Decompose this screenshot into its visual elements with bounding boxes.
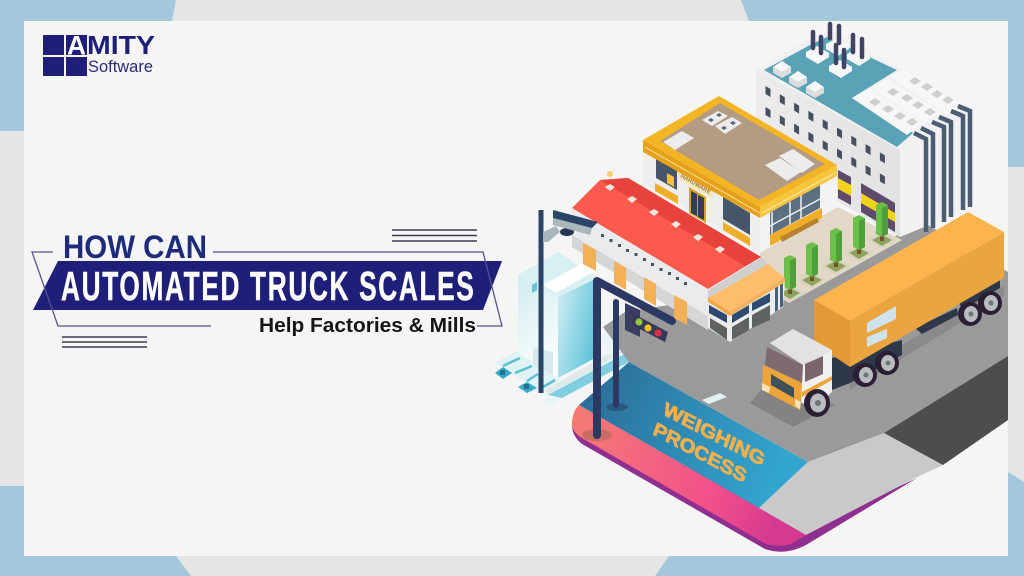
gable — [708, 257, 768, 298]
red roof — [572, 178, 761, 289]
logo — [43, 30, 155, 76]
shop sign: HARDWARE — [679, 174, 711, 196]
concrete apron — [759, 433, 943, 535]
warehouse — [572, 171, 785, 342]
roof panels — [663, 131, 815, 181]
logo: Software — [88, 58, 153, 76]
window plinths — [655, 183, 678, 204]
hardware shop building — [643, 96, 837, 253]
warehouse doors — [583, 243, 687, 325]
left wall windows — [656, 158, 677, 190]
rooftop boxes — [773, 67, 824, 98]
roof — [660, 103, 825, 200]
chimneys — [813, 24, 862, 67]
roof — [756, 29, 973, 150]
windows — [766, 86, 885, 184]
roof parapet — [643, 96, 837, 207]
annex windows — [709, 283, 783, 340]
left wall — [643, 140, 760, 253]
annex wall — [708, 280, 785, 342]
label: weighing process — [651, 398, 768, 487]
wall pipes — [914, 106, 970, 232]
scale deck — [542, 326, 629, 407]
road surface — [603, 225, 1008, 462]
banner — [33, 261, 502, 310]
truck shadow — [750, 380, 835, 427]
rear wheels — [853, 291, 1002, 387]
asphalt strip — [884, 356, 1008, 465]
right wall — [900, 108, 973, 237]
bench — [780, 218, 819, 242]
roof vents — [605, 184, 725, 253]
shop door — [689, 187, 706, 223]
scale ramp and base — [495, 350, 560, 393]
chassis — [832, 340, 902, 390]
banner outline frame — [32, 252, 502, 326]
rooftop solar rows — [852, 89, 922, 135]
label: weighing process: PROCESS — [651, 418, 750, 487]
logo: MITY — [87, 32, 155, 60]
trees — [775, 202, 897, 302]
security camera pole — [541, 210, 598, 393]
title block — [32, 229, 502, 347]
subheading: Help Factories & Mills — [259, 314, 476, 337]
right wall — [760, 165, 837, 253]
truck — [750, 212, 1004, 427]
lane marking — [702, 393, 727, 404]
annex roof — [708, 264, 785, 312]
roof finial — [607, 171, 613, 177]
left wall — [756, 69, 900, 237]
platform underside — [572, 409, 917, 552]
traffic light — [582, 281, 672, 441]
ac units — [702, 111, 742, 134]
loading doors — [838, 170, 895, 232]
trailer shadow — [850, 286, 1004, 390]
weighing zone — [579, 362, 808, 508]
heading: how can: HOW CAN — [63, 229, 207, 265]
storefront glazing — [770, 183, 820, 235]
shop sign — [677, 168, 713, 199]
stripes — [62, 230, 477, 347]
plaza — [760, 207, 902, 303]
warehouse vents — [601, 234, 687, 285]
heading: automated truck scales: AUTOMATED TRUCK SCALES — [61, 264, 474, 310]
warehouse wall — [572, 208, 708, 330]
trailer — [814, 212, 1004, 367]
cab — [762, 329, 832, 417]
platform pink kerb — [572, 405, 806, 546]
glass weighing cabin — [518, 252, 597, 378]
label: weighing process: WEIGHING — [661, 398, 768, 470]
logo: A — [67, 30, 86, 60]
tall factory building — [756, 24, 973, 237]
